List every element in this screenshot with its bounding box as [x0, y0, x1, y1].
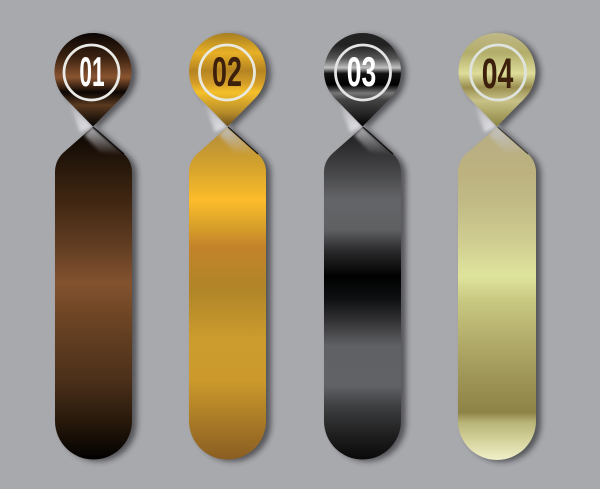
column 01: brown	[54, 33, 137, 461]
column 03: silver-black	[324, 33, 406, 462]
body highlight 04	[488, 128, 520, 152]
number 03: 03	[347, 49, 376, 96]
body highlight 01	[84, 127, 124, 155]
number 04: 04	[482, 49, 514, 97]
ring 03	[336, 45, 390, 100]
pin 01	[54, 33, 132, 126]
fold shadow 04	[498, 127, 528, 154]
shadow 01	[60, 35, 137, 461]
fold highlight 01	[68, 100, 92, 132]
pin 04	[458, 33, 536, 127]
fold highlight 03	[338, 100, 362, 132]
pin 02	[189, 33, 266, 127]
fold highlight 04	[472, 100, 497, 132]
fold shadow 03	[363, 127, 393, 154]
column 02: gold	[189, 33, 271, 462]
body highlight 03	[353, 127, 388, 154]
fold highlight 02	[203, 100, 228, 132]
shadow 02	[194, 35, 271, 462]
body 04	[458, 127, 536, 460]
number 02: 02	[212, 49, 242, 96]
number 01: 01	[79, 49, 105, 96]
ring 02	[200, 45, 254, 100]
column 04: champagne	[458, 33, 541, 462]
fold shadow 02	[228, 127, 258, 154]
pin 03	[324, 33, 401, 127]
ring 04	[470, 45, 526, 100]
body 02	[189, 127, 266, 460]
body highlight 02	[218, 127, 254, 154]
body 01	[55, 127, 132, 460]
fold shadow 01	[93, 127, 124, 154]
ring 01	[64, 45, 119, 100]
body 03	[324, 127, 401, 460]
shadow 04	[463, 35, 541, 462]
shadow 03	[329, 35, 406, 462]
